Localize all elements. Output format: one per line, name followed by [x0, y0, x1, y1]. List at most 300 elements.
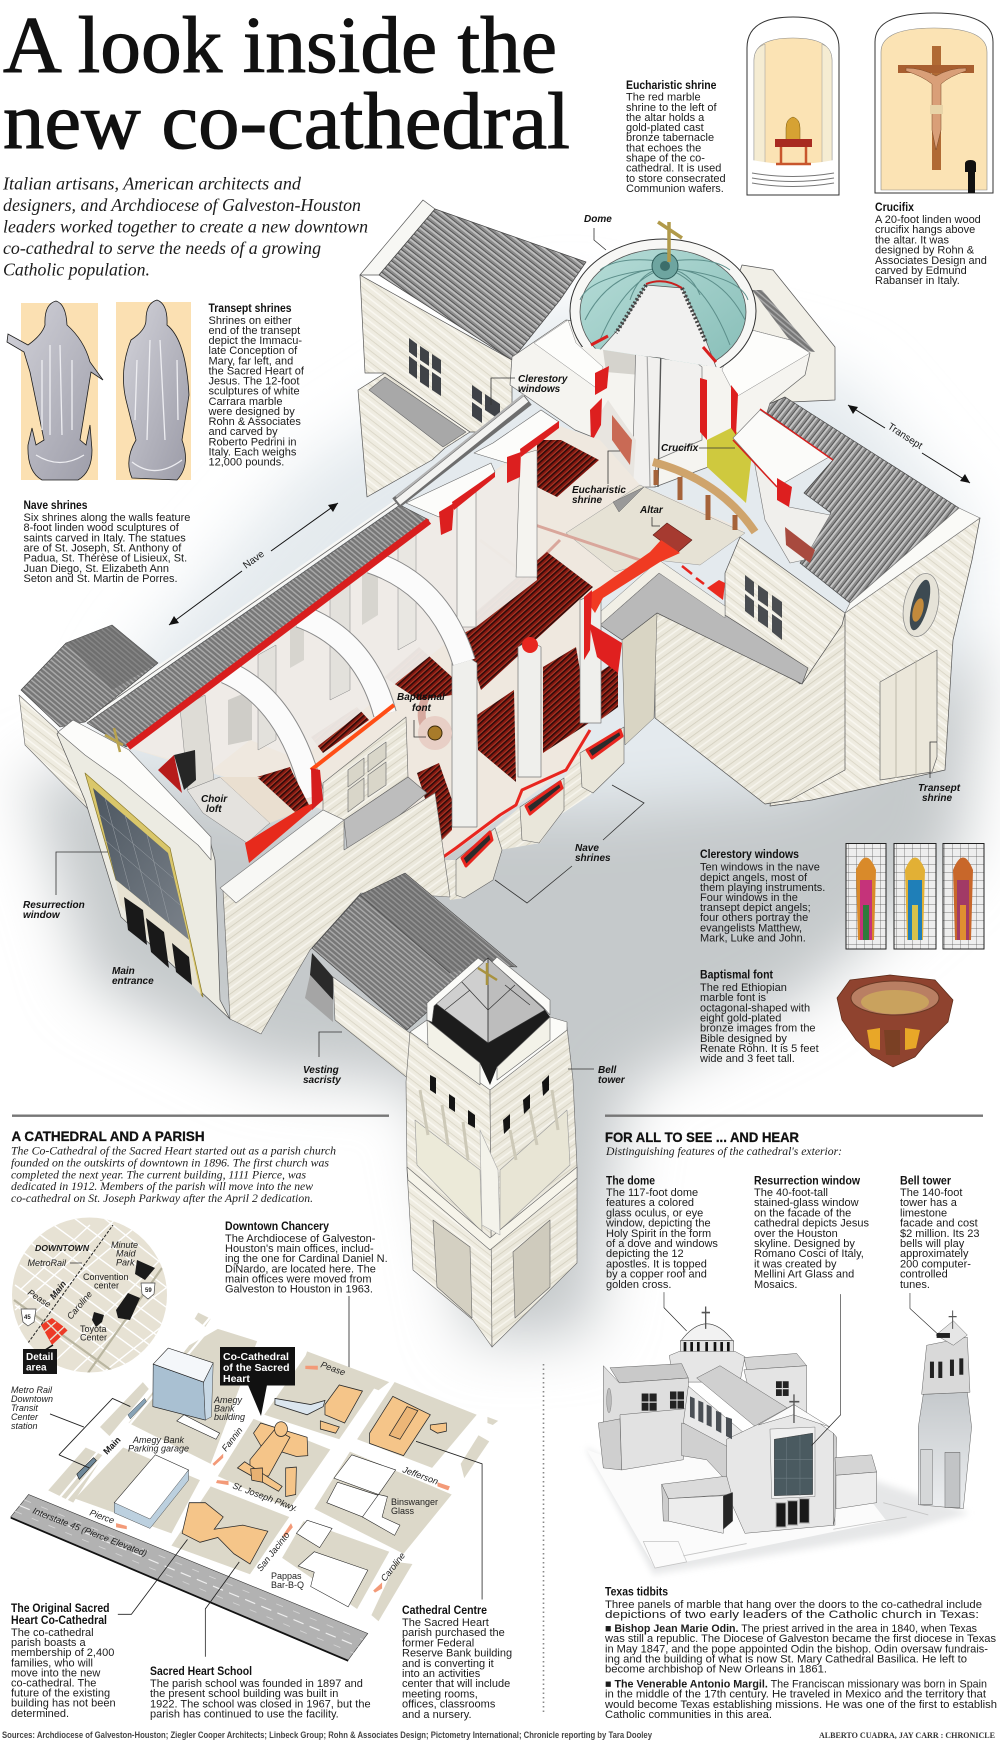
baptismal font text: bronze images from the [700, 1023, 816, 1035]
texas tidbits: ing and the building of what is now St. Mary Cathedral Basilica. He left to [605, 1654, 967, 1666]
crucifix text: crucifix hangs above [875, 224, 975, 236]
resurrection window text: Mosaics. [754, 1279, 797, 1291]
callout labels: Resurrection [23, 900, 85, 911]
the dome text: golden cross. [606, 1279, 671, 1291]
nave shrines text: Nave shrines [24, 500, 88, 512]
locator map: area [26, 1362, 47, 1374]
nave shrines text: are of St. Joseph, St. Anthony of [24, 542, 182, 554]
cathedral centre text: Cathedral Centre [402, 1605, 487, 1617]
baptismal font text: Bible designed by [700, 1033, 787, 1045]
transept shrines text: 12,000 pounds. [208, 457, 284, 469]
arrow: transept [848, 405, 970, 483]
sacred heart school text [150, 1666, 371, 1721]
original sacred heart text: membership of 2,400 [11, 1647, 114, 1659]
left wing [19, 625, 158, 810]
transept shrines text: Mary, far left, and [208, 355, 293, 367]
cathedral centre text: offices, classrooms [402, 1699, 496, 1711]
rear wing of the cathedral [358, 200, 586, 497]
original sacred heart text: parish boasts a [11, 1637, 86, 1649]
transept shrines text: and carved by [208, 426, 278, 438]
pappas building [296, 1520, 368, 1607]
tower model [918, 1321, 972, 1509]
original sacred heart text [11, 1603, 116, 1720]
locator map: Main [48, 1279, 69, 1301]
eucharistic shrine text: Eucharistic shrine [626, 80, 716, 92]
the dome text: The 117-foot dome [606, 1187, 698, 1199]
parking garage [114, 1455, 189, 1527]
eucharistic shrine text: that echoes the [626, 142, 701, 154]
interstate 45 [11, 1494, 368, 1660]
parish history text: dedicated in 1912. Members of the parish will move into the new [11, 1181, 313, 1193]
baptismal font text: Baptismal font [700, 970, 773, 982]
cathedral centre text: The Sacred Heart [402, 1617, 489, 1629]
clerestory windows text: evangelists Matthew, [700, 922, 802, 934]
crucifix text: carved by Edmund [875, 265, 967, 277]
original sacred heart text: co-cathedral. The [11, 1678, 96, 1690]
dome model [681, 1306, 733, 1354]
downtown street map [11, 1313, 498, 1661]
eucharistic shrine niche image [747, 17, 839, 195]
choir loft section [158, 705, 394, 863]
downtown chancery text: Galveston to Houston in 1963. [225, 1284, 373, 1296]
eucharistic shrine text: Communion wafers. [626, 183, 724, 195]
resurrection window text: over the Houston [754, 1228, 838, 1240]
eucharistic shrine text: shape of the co- [626, 152, 705, 164]
altar [653, 523, 692, 553]
arrow: nave [169, 503, 338, 625]
transept shrines text: late Conception of [208, 345, 298, 357]
baptismal font text [699, 970, 819, 1065]
eucharistic shrine text: to store consecrated [626, 173, 726, 185]
intro text: Catholic population. [3, 260, 150, 280]
downtown chancery text: ing the one for Cardinal Daniel N. [225, 1253, 388, 1265]
downtown chancery text: Downtown Chancery [225, 1221, 330, 1233]
map labels: St. Joseph Pkwy. [231, 1480, 299, 1513]
nave shrines text: 8-foot linden wood sculptures of [24, 522, 180, 534]
original sacred heart text: determined. [11, 1708, 69, 1720]
intro text [2, 174, 368, 280]
locator map: Pease [26, 1287, 53, 1310]
callout labels: shrine [572, 495, 602, 506]
clerestory windows text: Mark, Luke and John. [700, 932, 806, 944]
downtown chancery text [225, 1221, 388, 1390]
callout labels: tower [598, 1075, 626, 1086]
heading: for all to see [605, 1129, 842, 1158]
cathedral centre text: and is converting it [402, 1658, 494, 1670]
locator map: Caroline [65, 1289, 94, 1321]
original sacred heart text: Heart Co-Cathedral [11, 1615, 107, 1627]
bell tower text: controlled [900, 1269, 948, 1281]
co-cathedral building [237, 1422, 308, 1497]
school building [182, 1503, 268, 1564]
callout labels: Dome [584, 214, 612, 225]
upper nave wall, columns and beams [126, 410, 559, 790]
clerestory windows text: Four windows in the [700, 892, 798, 904]
map labels: Pappas [271, 1571, 302, 1581]
map labels: Parking garage [128, 1444, 189, 1454]
eucharistic shrine text: cathedral. It is used [626, 163, 721, 175]
crucifix text: Associates Design and [875, 255, 987, 267]
downtown chancery text: DiNardo, are located here. The [225, 1263, 376, 1275]
bell tower text: approximately [900, 1248, 969, 1260]
heading: for all to see: FOR ALL TO SEE ... AND HEAR [605, 1129, 799, 1145]
callout labels: Main [112, 966, 135, 977]
map labels: San Jacinto [255, 1530, 292, 1573]
eucharistic shrine text: shrine to the left of [626, 102, 717, 114]
resurrection window text: on the facade of the [754, 1207, 851, 1219]
nave shrines text: Seton and St. Martin de Porres. [24, 573, 178, 585]
cutaway cathedral illustration [19, 200, 980, 1347]
callout labels: window [23, 910, 61, 921]
heading: a cathedral and a parish: A CATHEDRAL AND A PARISH [12, 1128, 204, 1144]
callout labels: loft [206, 804, 222, 815]
nave roof [85, 394, 528, 747]
transept shrines text: were designed by [208, 406, 295, 418]
bell tower text: $2 million. Its 23 [900, 1228, 979, 1240]
map labels: building [214, 1412, 245, 1422]
callout labels: windows [518, 384, 561, 395]
nave shrines text: saints carved in Italy. The statues [24, 532, 186, 544]
nave arches [226, 562, 464, 797]
downtown chancery text: The Archdiocese of Galveston- [225, 1233, 376, 1245]
locator map: center [94, 1280, 119, 1290]
co-cathedral tag: Heart [223, 1373, 250, 1385]
right transept inner vault [733, 409, 833, 563]
map labels: Bar-B-Q [271, 1580, 304, 1590]
the dome text: apostles. It is topped [606, 1258, 707, 1270]
crucifix text: A 20-foot linden wood [875, 214, 981, 226]
map labels: Binswanger [391, 1497, 438, 1507]
crucifix text: designed by Rohn & [875, 245, 975, 257]
sacred heart school text: parish has continued to use the facility. [150, 1709, 339, 1721]
map labels: station [11, 1421, 38, 1431]
map labels: Jefferson [400, 1464, 440, 1487]
model leader lines [664, 1292, 937, 1445]
nave columns [452, 595, 601, 827]
eucharistic shrine text: the altar holds a [626, 112, 705, 124]
resurrection window text: cathedral depicts Jesus [754, 1218, 869, 1230]
cathedral centre text: parish purchased the [402, 1627, 505, 1639]
sacred heart school text: the present school building was built in [150, 1688, 338, 1700]
bell tower text: The 140-foot [900, 1187, 962, 1199]
callout labels: entrance [112, 976, 154, 987]
texas tidbits [604, 1586, 997, 1721]
parish history text: co-cathedral on St. Joseph Parkway after the April 2 dedication. [11, 1193, 313, 1205]
credit line: ALBERTO CUADRA, JAY CARR : CHRONICLE [819, 1730, 995, 1740]
transept shrines text: depict the Immacu- [208, 335, 302, 347]
map labels: Interstate 45 (Pierce Elevated) [31, 1506, 148, 1558]
parish history text: founded on the outskirts of downtown in 1896. The first church was [11, 1157, 330, 1169]
right rear wing behind dome [720, 265, 835, 403]
cathedral centre text: former Federal [402, 1637, 474, 1649]
nave right wall and shrine bays [439, 727, 624, 900]
map labels: Downtown [11, 1394, 53, 1404]
callout labels: Vesting [303, 1065, 339, 1076]
heading: for all to see: Distinguishing features of the cathedral's exterior: [605, 1146, 842, 1158]
map labels: Glass [391, 1506, 415, 1516]
callout labels: Crucifix [661, 443, 699, 454]
intro text: Italian artisans, American architects and [2, 174, 302, 194]
crucifix niche image [875, 13, 993, 193]
sacred heart school text: 1922. The school was closed in 1967, but the [150, 1698, 371, 1710]
transept shrines text: end of the transept [208, 325, 300, 337]
co-cathedral tag: Co-Cathedral [223, 1351, 289, 1363]
map labels: Transit [11, 1403, 38, 1413]
arrow: transept: Transept [885, 421, 924, 452]
nave interior floor [126, 425, 755, 862]
eucharistic shrine text [626, 80, 726, 195]
bell tower [406, 957, 577, 1347]
map labels: Amegy Bank [132, 1435, 185, 1445]
resurrection window text: The 40-foot-tall [754, 1187, 828, 1199]
the dome text: window, depicting the [605, 1218, 711, 1230]
resurrection window text: skyline. Designed by [754, 1238, 855, 1250]
leader lines [118, 1441, 482, 1657]
texas tidbits: depictions of two early leaders of the Catholic church in Texas: [605, 1609, 979, 1621]
resurrection window text [754, 1176, 869, 1291]
nave shrines text [24, 500, 190, 585]
eucharistic shrine text: The red marble [626, 92, 701, 104]
eucharistic shrine text: gold-plated cast [626, 122, 704, 134]
parish history text: The Co-Cathedral of the Sacred Heart started out as a parish church [11, 1145, 336, 1157]
transept statues [7, 300, 191, 480]
intro text: designers, and Archdiocese of Galveston-Houston [3, 195, 361, 215]
callout labels: Nave [575, 843, 599, 854]
map labels: Bank [214, 1404, 235, 1414]
sacred heart school text: The parish school was founded in 1897 and [150, 1678, 363, 1690]
nave shrines text: Padua, St. Thérèse of Lisieux, St. [24, 553, 187, 565]
transept shrines text [208, 303, 305, 469]
callout labels: Transept [918, 783, 961, 794]
cathedral centre text [402, 1605, 512, 1721]
baptismal font text: eight gold-plated [700, 1012, 781, 1024]
transept shrines text: Carrara marble [208, 396, 282, 408]
bell tower text: facade and cost [900, 1218, 978, 1230]
clerestory windows text: Clerestory windows [700, 849, 799, 861]
original sacred heart text: move into the new [11, 1667, 100, 1679]
clerestory windows text: four others portray the [700, 912, 808, 924]
arrow: nave: Nave [241, 549, 267, 571]
transept shrines text: Rohn & Associates [208, 416, 301, 428]
transept shrines text: Italy. Each weighs [208, 446, 297, 458]
crenellated red cut line [584, 540, 725, 673]
front facade [57, 720, 230, 1019]
locator map: Detail [26, 1352, 53, 1363]
locator map: 59 [145, 1288, 152, 1294]
cathedral centre text: center that will include [402, 1678, 510, 1690]
amegy bank [153, 1364, 205, 1420]
texas tidbits: in the middle of the 17th century. He traveled in Mexico and the territory that [605, 1689, 986, 1701]
map labels: Pease [319, 1359, 347, 1378]
callout labels [23, 214, 961, 1086]
map labels: Caroline [379, 1551, 407, 1583]
clerestory windows text: Ten windows in the nave [700, 862, 820, 874]
texas tidbits: become archbishop of New Orleans in 1861. [605, 1664, 827, 1676]
texas tidbits: in May 1847, and the pope appointed Odin the bishop. Odin oversaw fundrais- [605, 1643, 988, 1655]
annexes [662, 1455, 877, 1533]
baptismal font text: Renate Rohn. It is 5 feet [700, 1043, 819, 1055]
parish history text: completed the next year. The current building, 1111 Pierce, was [11, 1169, 307, 1181]
crossing and wings [598, 1351, 807, 1488]
bell tower text: tower has a [900, 1197, 958, 1209]
upper white beam 1 [406, 463, 495, 517]
callout labels: Clerestory [518, 374, 568, 385]
bell tower text: tunes. [900, 1279, 930, 1291]
street blocks [48, 1313, 498, 1621]
rail stations [128, 1398, 146, 1419]
exterior model of cathedral [585, 1292, 972, 1574]
crucifix text [875, 202, 987, 287]
map labels: Fannin [220, 1425, 245, 1453]
callout labels: Baptismal [397, 692, 445, 703]
the dome text: by a copper roof and [606, 1269, 707, 1281]
transept shrines text: the Sacred Heart of [208, 365, 305, 377]
sources line: Sources: Archdiocese of Galveston-Houston; Ziegler Cooper Architects; Linbeck Group; Rohn & Associates Design; Pictometry International; Chronicle reporting by Tara Dooley [2, 1730, 653, 1741]
locator map [12, 1215, 170, 1375]
locator map: DOWNTOWN [35, 1244, 89, 1253]
dome cross [658, 222, 682, 262]
locator map: Convention [83, 1272, 129, 1282]
nave shrines text: Six shrines along the walls feature [24, 512, 190, 524]
map labels: Metro Rail [11, 1385, 53, 1395]
callout labels: Eucharistic [572, 485, 626, 496]
callout labels: shrine [922, 793, 952, 804]
map labels: Pierce [88, 1507, 116, 1526]
cathedral centre text: into an activities [402, 1668, 481, 1680]
section rules [12, 1114, 983, 1117]
street arrows [116, 1366, 450, 1593]
vesting sacristy wing [305, 873, 517, 1080]
original sacred heart text: The co-cathedral [11, 1627, 94, 1639]
baptismal font text: wide and 3 feet tall. [699, 1053, 795, 1065]
resurrection window text: Romano Cosci of Italy, [754, 1248, 864, 1260]
bell tower text: 200 computer- [900, 1258, 971, 1270]
the dome text: of a dove and windows [606, 1238, 718, 1250]
transept shrines text: Jesus. The 12-foot [208, 376, 299, 388]
the dome text: Holy Spirit in the form [606, 1228, 711, 1240]
bell tower text: Bell tower [900, 1176, 951, 1188]
locator map: 45 [24, 1315, 31, 1321]
title: new co-cathedral [3, 76, 570, 166]
baptismal font text: octagonal-shaped with [700, 1002, 810, 1014]
original sacred heart text: building has not been [11, 1698, 116, 1710]
clerestory windows text [700, 849, 825, 944]
callout labels: sacristy [303, 1075, 341, 1086]
crossing block and central pillar [510, 320, 810, 503]
crucifix text: the altar. It was [875, 234, 949, 246]
the dome text: depicting the 12 [606, 1248, 684, 1260]
intro text: leaders worked together to create a new downtown [3, 216, 368, 236]
nave [683, 1366, 837, 1533]
locator map: Maid [116, 1249, 137, 1259]
nave shrines text: Juan Diego, St. Elizabeth Ann [24, 563, 169, 575]
upper white beam 2 [474, 410, 559, 463]
map labels: Amegy [213, 1395, 243, 1405]
locator map: Center [80, 1332, 107, 1342]
callout labels: font [412, 703, 432, 714]
transept shrines text: Roberto Pedrini in [208, 436, 297, 448]
transept shrines text: Shrines on either [208, 315, 292, 327]
pews [257, 440, 618, 843]
clerestory windows text: transept depict angels; [700, 902, 811, 914]
the dome text: The dome [606, 1176, 655, 1188]
baptismal font text: The red Ethiopian [700, 982, 787, 994]
sacred heart school text: Sacred Heart School [150, 1666, 252, 1678]
binswanger glass building [327, 1455, 400, 1535]
locator map: MetroRail [28, 1258, 67, 1268]
texas tidbits: ■ The Venerable Antonio Margil. The Franciscan missionary was born in Spain [605, 1678, 987, 1690]
clerestory windows text: depict angels, most of [700, 872, 808, 884]
locator map: Toyota [80, 1324, 107, 1334]
resurrection window text: Mellini Art Glass and [754, 1269, 854, 1281]
bell tower text: limestone [900, 1207, 947, 1219]
original sacred heart text: families, who will [11, 1657, 93, 1669]
texas tidbits: would become Texas establishing missions. He was one of the first to establish [604, 1699, 997, 1711]
map labels: Main [101, 1435, 123, 1456]
texas tidbits: Three panels of marble that hang over the doors to the co-cathedral include [605, 1599, 982, 1611]
clerestory windows text: them playing instruments. [700, 882, 825, 894]
right transept [600, 397, 980, 806]
callout labels: Bell [598, 1065, 617, 1076]
lower nave walls [220, 717, 450, 1034]
crucifix text: Crucifix [875, 202, 915, 214]
map labels [11, 1359, 440, 1590]
altar rail [653, 462, 755, 532]
the dome text: glass oculus, or eye [606, 1207, 703, 1219]
baptismal font image [837, 975, 953, 1067]
title [3, 0, 570, 166]
callout labels: Altar [639, 505, 664, 516]
resurrection window text: stained-glass window [754, 1197, 859, 1209]
resurrection window text: Resurrection window [754, 1176, 860, 1188]
crucifix text: Rabanser in Italy. [875, 275, 960, 287]
parish history text [11, 1145, 336, 1205]
texas tidbits: Catholic communities in this area. [605, 1709, 772, 1721]
ground shadow behind cathedral [25, 300, 985, 1340]
stained-glass window images [846, 844, 984, 949]
downtown chancery text: main offices were moved from [225, 1273, 372, 1285]
original sacred heart text: future of the existing [11, 1688, 110, 1700]
callout labels: Choir [201, 794, 228, 805]
bell tower text: bells will play [900, 1238, 965, 1250]
callout labels: shrines [575, 853, 611, 864]
the dome text: features a colored [606, 1197, 694, 1209]
co-cathedral tag [220, 1347, 295, 1416]
texas tidbits: was still a republic. The Diocese of Galveston became the first diocese in Texas [604, 1633, 996, 1645]
dome [570, 222, 756, 383]
intro text: co-cathedral to serve the needs of a growing [3, 238, 321, 258]
texas tidbits: ■ Bishop Jean Marie Odin. The priest arrived in the area in 1840, when Texas [605, 1623, 977, 1635]
the dome text [605, 1176, 718, 1291]
resurrection window text: it was created by [754, 1258, 837, 1270]
chancery building [275, 1385, 362, 1433]
title: A look inside the [3, 0, 557, 90]
map labels: Center [11, 1412, 39, 1422]
locator map: Minute [111, 1240, 138, 1250]
cathedral centre text: Reserve Bank building [402, 1648, 512, 1660]
locator map: Park [116, 1257, 135, 1267]
bell tower text [900, 1176, 979, 1291]
transept shrines text: sculptures of white [208, 386, 300, 398]
cathedral centre building [370, 1396, 446, 1456]
co-cathedral tag: of the Sacred [223, 1362, 290, 1374]
original sacred heart text: The Original Sacred [11, 1603, 110, 1615]
downtown chancery text: Houston's main offices, includ- [225, 1243, 374, 1255]
transept shrines text: Transept shrines [208, 303, 292, 315]
texas tidbits: Texas tidbits [605, 1586, 668, 1598]
cathedral centre text: and a nursery. [402, 1709, 472, 1721]
cathedral centre text: meeting rooms, [402, 1688, 478, 1700]
